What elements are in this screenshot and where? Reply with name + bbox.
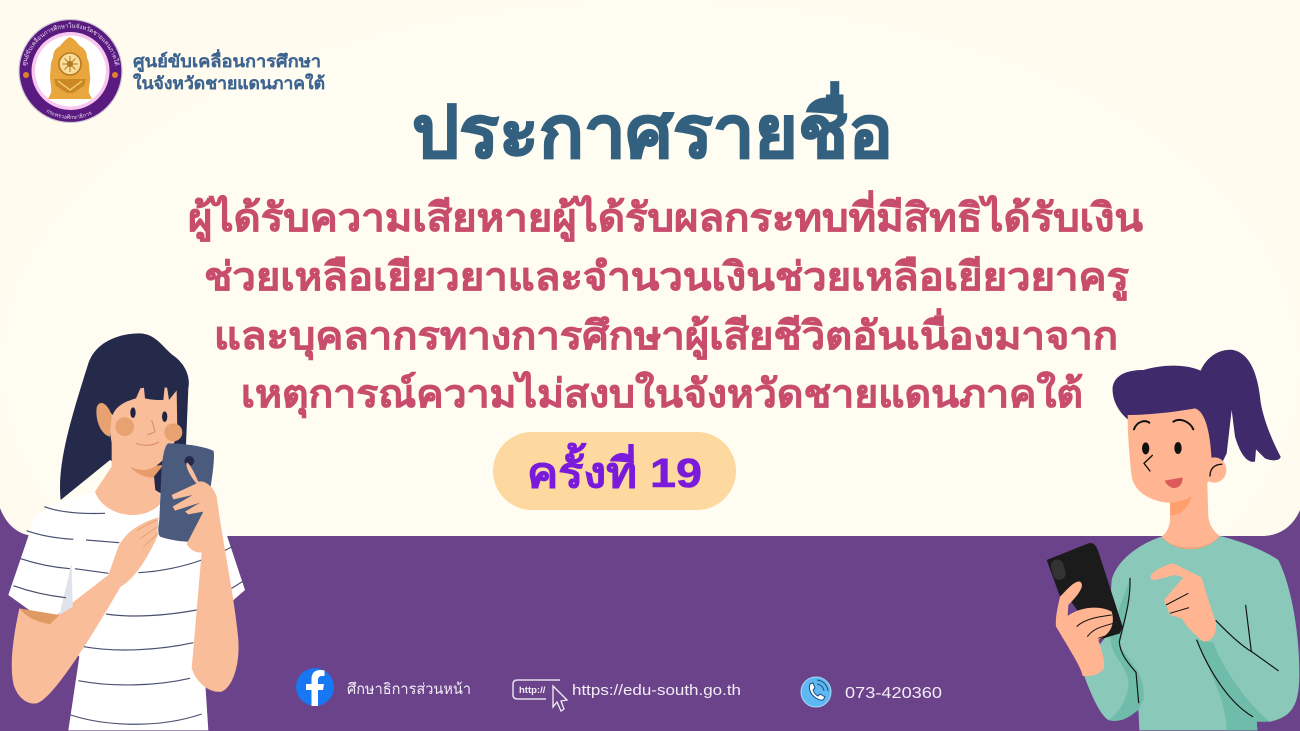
icon: browser cursor xyxy=(513,680,567,711)
round badge: ครั้งที่ 19 xyxy=(527,443,702,496)
facebook link xyxy=(296,668,471,706)
facebook page name: ศึกษาธิการส่วนหน้า xyxy=(347,681,471,698)
round badge xyxy=(493,432,736,510)
organisation name: ศูนย์ขับเคลื่อนการศึกษา xyxy=(133,49,321,73)
website address: https://edu-south.go.th xyxy=(572,682,741,699)
subtitle: ช่วยเหลือเยียวยาและจำนวนเงินช่วยเหลือเยียวยาครู xyxy=(204,256,1129,301)
subtitle: ผู้ได้รับความเสียหายผู้ได้รับผลกระทบที่มีสิทธิได้รับเงิน xyxy=(188,190,1143,242)
logo: ศูนย์ขับเคลื่อนการศึกษาในจังหวัดชายแดนภาคใต้ xyxy=(23,22,120,66)
icon: facebook xyxy=(296,668,334,706)
purple footer band xyxy=(0,508,1300,731)
website link xyxy=(513,680,741,711)
icon: browser cursor: http:// xyxy=(519,685,546,696)
logo: กระทรวงศึกษาธิการ xyxy=(46,110,92,119)
subtitle xyxy=(188,190,1143,418)
illustration: woman with striped shirt xyxy=(8,333,245,730)
logo xyxy=(18,18,123,124)
illustration: woman with ponytail and teal sweater xyxy=(1047,350,1299,730)
subtitle: และบุคลากรทางการศึกษาผู้เสียชีวิตอันเนื่องมาจาก xyxy=(214,308,1118,360)
organisation name: ในจังหวัดชายแดนภาคใต้ xyxy=(133,73,325,93)
subtitle: เหตุการณ์ความไม่สงบในจังหวัดชายแดนภาคใต้ xyxy=(241,371,1083,418)
icon: phone xyxy=(801,677,831,707)
phone contact xyxy=(801,677,942,707)
organisation name xyxy=(133,49,325,93)
phone number: 073-420360 xyxy=(845,685,942,702)
title: ประกาศรายชื่อ xyxy=(412,81,893,173)
